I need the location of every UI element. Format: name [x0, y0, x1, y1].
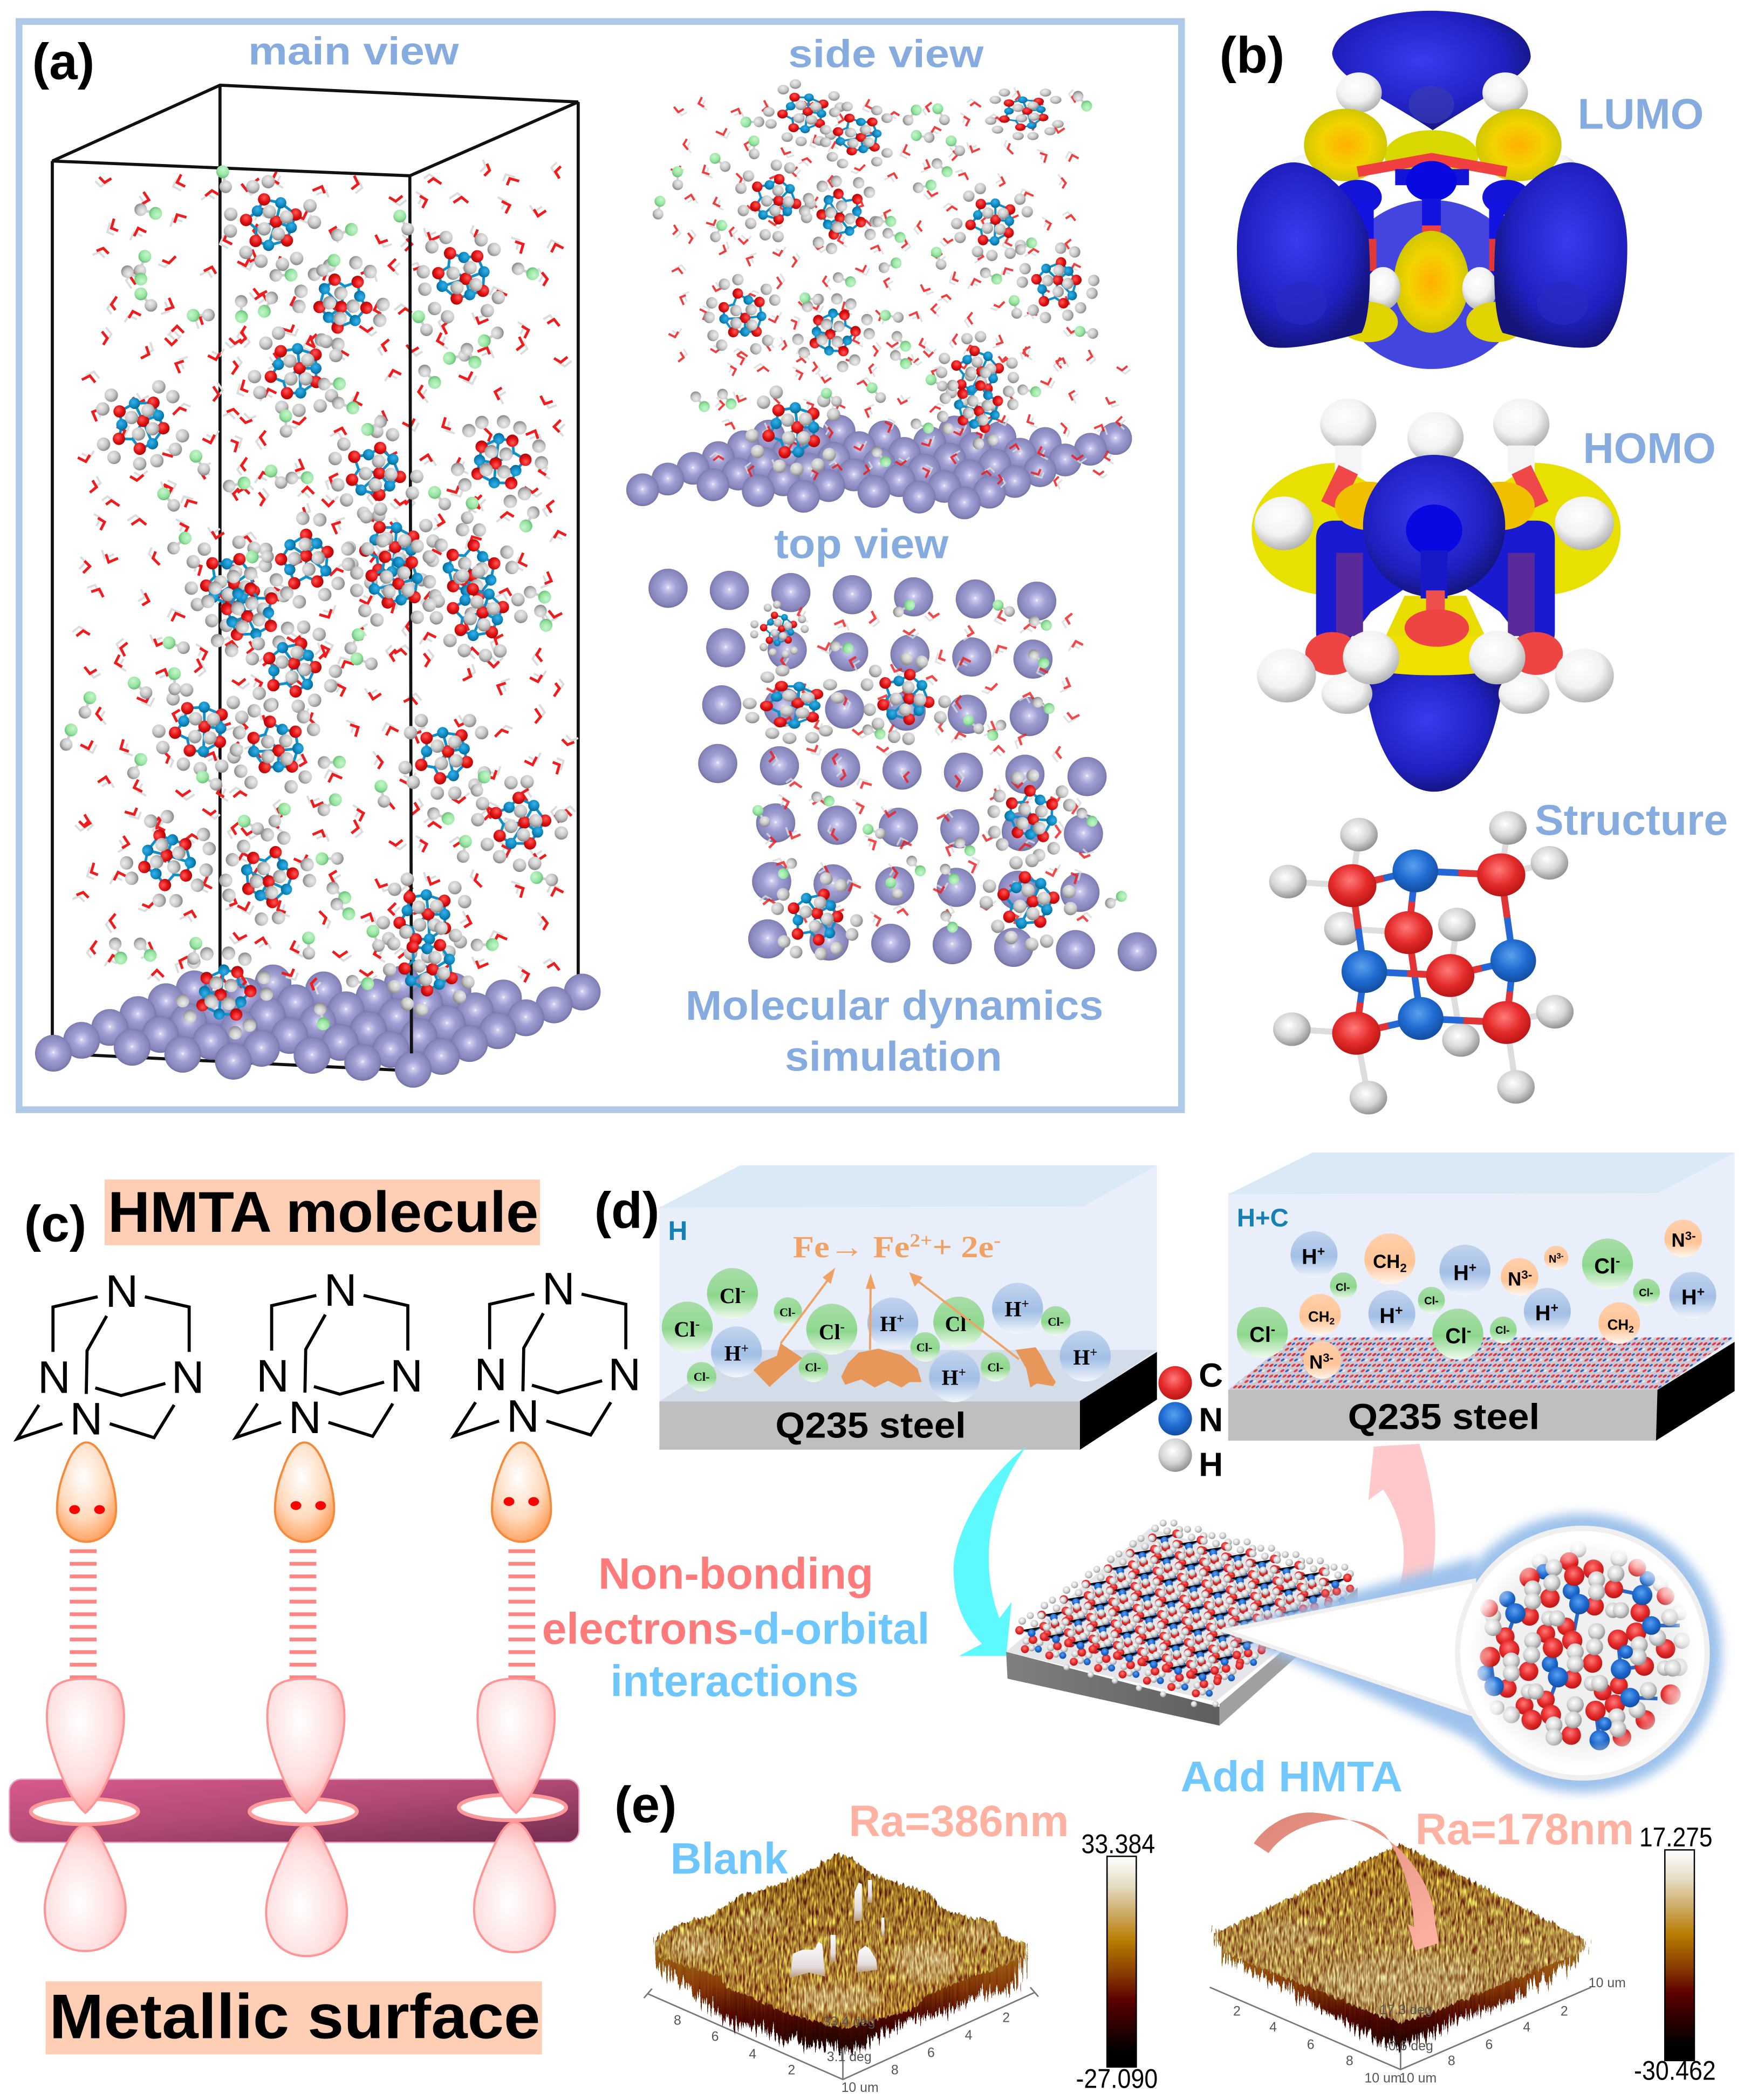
- color scale with HMTA: [1634, 1822, 1716, 2086]
- AFM surface with HMTA: 6: [1486, 2037, 1493, 2052]
- ions left box: +: [1090, 1345, 1097, 1360]
- caption: molecular dynamics simulation: Molecular dynamics: [686, 983, 1103, 1029]
- heading: top view: top view: [774, 521, 949, 568]
- legend: atoms C N H: N: [1199, 1401, 1223, 1438]
- ions left box: Cl-: [917, 1340, 932, 1354]
- legend: atoms C N H: [1158, 1357, 1223, 1484]
- color scale with HMTA: -30.462: [1634, 2056, 1716, 2086]
- AFM surface blank: 6: [927, 2045, 935, 2060]
- label: LUMO: LUMO: [1578, 90, 1704, 138]
- ions left box: Cl-: [1048, 1315, 1064, 1328]
- ions left box: Cl: [819, 1320, 840, 1344]
- AFM surface blank: 33.4 deg: [823, 2014, 876, 2029]
- ions right box: H: [1535, 1301, 1551, 1325]
- color scale with HMTA: 17.275: [1639, 1822, 1713, 1852]
- color scale blank: 33.384: [1081, 1829, 1155, 1859]
- ions right box: [1237, 1219, 1716, 1379]
- curved salmon arrow: [1254, 1812, 1439, 1951]
- AFM surface with HMTA: 10 um: [1364, 2071, 1402, 2086]
- label H: H: [668, 1216, 687, 1246]
- Fe atoms top view: [648, 569, 1157, 971]
- ions right box: H: [1453, 1262, 1469, 1285]
- ions left box: -: [741, 1284, 746, 1298]
- AFM surface blank: 4: [965, 2028, 973, 2043]
- HMTA ball and stick structure: [1269, 811, 1574, 1114]
- hydrogen chloride molecules side view: [647, 90, 1100, 468]
- HMTA structural formula 3: [454, 1263, 641, 1442]
- caption: molecular dynamics simulation: [686, 983, 1103, 1080]
- ions left box: -: [695, 1317, 700, 1332]
- AFM surface blank: 4: [749, 2047, 756, 2062]
- ions right box: Cl: [1445, 1324, 1467, 1348]
- ions right box: 3-: [1685, 1229, 1696, 1243]
- ions right box: CH: [1373, 1251, 1400, 1272]
- ions left box: -: [840, 1320, 845, 1334]
- water molecules side view: [668, 87, 1131, 489]
- reaction equation: 2+: [909, 1230, 932, 1251]
- ions left box: Cl-: [694, 1370, 710, 1383]
- reaction equation: -: [994, 1230, 1001, 1251]
- white height spikes: [790, 1880, 884, 1978]
- ions left box: H: [1005, 1298, 1021, 1321]
- panel c: non-bonding electron to d-orbital interaction: [9, 1179, 641, 2054]
- reaction equation: Fe→ Fe: [793, 1230, 897, 1264]
- AFM surface with HMTA: 10 um: [1399, 2071, 1437, 2086]
- ions left box: +: [741, 1341, 749, 1356]
- ions left box: [662, 1268, 1111, 1402]
- label b: (b): [1220, 26, 1284, 84]
- AFM surface blank: 8: [891, 2063, 899, 2078]
- ions right box: 3-: [1323, 1351, 1333, 1365]
- interaction caption: electrons-d-orbital: [542, 1604, 929, 1653]
- AFM surface with HMTA: 8: [1346, 2053, 1353, 2068]
- ions right box: -: [1467, 1323, 1471, 1338]
- color scale blank: -27.090: [1076, 2064, 1158, 2094]
- ions right box: +: [1551, 1300, 1558, 1315]
- ions left box: Cl-: [987, 1361, 1003, 1374]
- HMTA structural formula 1: N: [172, 1351, 204, 1402]
- AFM surface blank: 2: [788, 2063, 795, 2078]
- ions left box: Cl: [945, 1312, 966, 1336]
- HMTA clusters main view: [87, 165, 581, 1047]
- front vertical edge of simulation box: [410, 176, 412, 1053]
- HMTA clusters side view: [698, 74, 1110, 482]
- ions right box: -: [1616, 1253, 1620, 1269]
- label: HOMO: HOMO: [1583, 424, 1716, 472]
- water molecules top view: [760, 608, 1094, 926]
- color scale blank: [1076, 1829, 1158, 2094]
- ions left box: Cl-: [779, 1306, 796, 1319]
- AFM surface blank: 3.1 deg: [827, 2049, 872, 2064]
- orbital overlap 3: [459, 1442, 566, 1952]
- ions left box: H: [942, 1366, 959, 1389]
- AFM surface blank: 2: [1002, 2010, 1010, 2026]
- legend: atoms C N H: C: [1199, 1357, 1223, 1394]
- ions right box: +: [1395, 1303, 1403, 1318]
- AFM surface blank: 8: [674, 2013, 681, 2028]
- left box: blank steel in acid: [659, 1165, 1157, 1450]
- ions right box: N: [1309, 1352, 1323, 1373]
- HMTA coated slab: [1006, 1519, 1358, 1726]
- magnified circular view: [1223, 1513, 1722, 1792]
- label e: (e): [614, 1776, 677, 1833]
- ions right box: +: [1697, 1284, 1705, 1299]
- right box: steel with HMTA film: [1228, 1153, 1735, 1441]
- ions left box: +: [1021, 1297, 1029, 1312]
- ions right box: H: [1681, 1285, 1697, 1309]
- AFM surface with HMTA: [1210, 1844, 1626, 2086]
- AFM surface with HMTA: 4: [1523, 2020, 1530, 2035]
- label: Ra=178nm: Ra=178nm: [1415, 1805, 1634, 1854]
- ions right box: N: [1672, 1230, 1685, 1251]
- Q235 steel label right: Q235 steel: [1348, 1397, 1540, 1437]
- ions right box: 3-: [1521, 1268, 1532, 1281]
- reaction equation: + 2e: [932, 1230, 994, 1264]
- AFM surface with HMTA: 8: [1448, 2053, 1455, 2068]
- ions left box: Cl-: [805, 1361, 821, 1374]
- arrow: pink to right box: [1369, 1444, 1435, 1604]
- panel d: corrosion mechanism: [542, 1153, 1735, 1801]
- panel a: molecular dynamics simulation: [19, 22, 1181, 1110]
- ions left box: H: [880, 1312, 897, 1336]
- AFM surface with HMTA: -0.6 deg: [1384, 2038, 1433, 2054]
- panel e: AFM roughness: [614, 1776, 1716, 2095]
- HMTA structural formula 1: [17, 1265, 204, 1444]
- LUMO orbital: [1237, 11, 1627, 369]
- arrow: cyan to coated surface: [954, 1447, 1026, 1656]
- ions right box: Cl: [1249, 1323, 1271, 1347]
- HMTA structural formula 1: N: [105, 1265, 138, 1317]
- simulation box back lines: [52, 85, 579, 1071]
- AFM surface blank: 6: [712, 2029, 719, 2044]
- ions right box: Cl-: [1639, 1287, 1653, 1299]
- ions right box: Cl-: [1336, 1281, 1350, 1293]
- interaction caption: interactions: [611, 1656, 859, 1706]
- ions right box: H: [1302, 1245, 1317, 1269]
- heading: main view: main view: [248, 30, 460, 73]
- hydrogen chloride molecules top view: [748, 595, 1129, 935]
- interaction caption: Non-bonding: [598, 1549, 873, 1598]
- caption: molecular dynamics simulation: simulation: [785, 1034, 1002, 1080]
- ions right box: -: [1271, 1322, 1275, 1337]
- metal bar: [9, 1779, 579, 1843]
- HMTA structural formula 2: N: [289, 1392, 322, 1443]
- heading: side view: side view: [788, 32, 984, 76]
- AFM surface with HMTA: 2: [1561, 2003, 1568, 2019]
- HMTA structural formula 3: N: [608, 1348, 641, 1400]
- label a: (a): [32, 33, 94, 91]
- ions left box: H: [1073, 1346, 1090, 1369]
- ions left box: H: [724, 1342, 741, 1366]
- hydrogen chloride molecules main view: [57, 163, 560, 1033]
- ions right box: 2: [1400, 1262, 1407, 1275]
- HOMO orbital: [1251, 399, 1620, 792]
- ions left box: Cl: [674, 1318, 695, 1341]
- ions right box: 2: [1629, 1324, 1634, 1334]
- ions left box: +: [897, 1312, 904, 1326]
- label c: (c): [24, 1195, 86, 1252]
- ions right box: CH: [1608, 1317, 1629, 1333]
- Fe surface slab main view: [35, 965, 600, 1088]
- AFM surface with HMTA: 10 um: [1589, 1975, 1626, 1990]
- AFM surface with HMTA: 6: [1307, 2037, 1315, 2052]
- HMTA structural formula 1: N: [38, 1351, 71, 1402]
- label: Add HMTA: Add HMTA: [1180, 1753, 1403, 1801]
- ions left box: Cl: [720, 1284, 741, 1308]
- ions right box: Cl: [1594, 1254, 1616, 1278]
- HMTA structural formula 2: N: [256, 1350, 289, 1401]
- AFM surface blank: 10 um: [842, 2080, 879, 2095]
- ions right box: CH: [1308, 1308, 1330, 1325]
- lattice of HMTA molecules on slab: [1015, 1519, 1354, 1707]
- AFM surface with HMTA: 17.3 deg: [1380, 2002, 1432, 2017]
- ions right box: H: [1379, 1304, 1395, 1328]
- heading: HMTA molecule: HMTA molecule: [108, 1179, 538, 1244]
- Fe surface slab side view: [626, 415, 1132, 519]
- HMTA structural formula 2: N: [390, 1350, 423, 1401]
- ions right box: 2: [1330, 1316, 1335, 1327]
- ions left box: +: [959, 1366, 966, 1380]
- orbital overlap 1: [31, 1442, 138, 1951]
- ions right box: 3-: [1556, 1252, 1564, 1261]
- label: Structure: Structure: [1535, 796, 1728, 844]
- ions right box: Cl-: [1424, 1295, 1439, 1307]
- legend: atoms C N H: H: [1199, 1447, 1223, 1484]
- ions right box: +: [1317, 1244, 1325, 1259]
- ions right box: Cl-: [1495, 1325, 1510, 1337]
- AFM surface blank: [644, 1853, 1038, 2095]
- ions left box: -: [966, 1312, 971, 1326]
- corrosion products and arrows: [754, 1270, 1056, 1387]
- orbital overlap 2: [250, 1442, 357, 1956]
- heading: Metallic surface: Metallic surface: [49, 1981, 540, 2052]
- ions right box: N: [1508, 1269, 1521, 1290]
- ions right box: +: [1469, 1260, 1476, 1276]
- HMTA structural formula 3: N: [474, 1348, 507, 1400]
- ions right box: N: [1549, 1253, 1556, 1265]
- Q235 steel label left: Q235 steel: [775, 1406, 966, 1446]
- water molecules main view: [72, 160, 578, 994]
- HMTA structural formula 1: N: [70, 1393, 102, 1444]
- HMTA clusters top view: [731, 594, 1090, 972]
- AFM surface with HMTA: 4: [1269, 2020, 1277, 2035]
- panel b: frontier orbitals: [1220, 11, 1728, 1114]
- interaction caption: [542, 1549, 929, 1706]
- label: Blank: Blank: [671, 1835, 788, 1884]
- label d: (d): [594, 1182, 659, 1239]
- HMTA structural formula 2: N: [324, 1264, 357, 1315]
- AFM surface with HMTA: 2: [1233, 2003, 1241, 2019]
- HMTA structural formula 3: N: [542, 1263, 575, 1314]
- label H+C: H+C: [1237, 1204, 1289, 1232]
- label: Ra=386nm: Ra=386nm: [849, 1797, 1069, 1846]
- HMTA structural formula 3: N: [507, 1390, 539, 1442]
- HMTA structural formula 2: [236, 1264, 423, 1443]
